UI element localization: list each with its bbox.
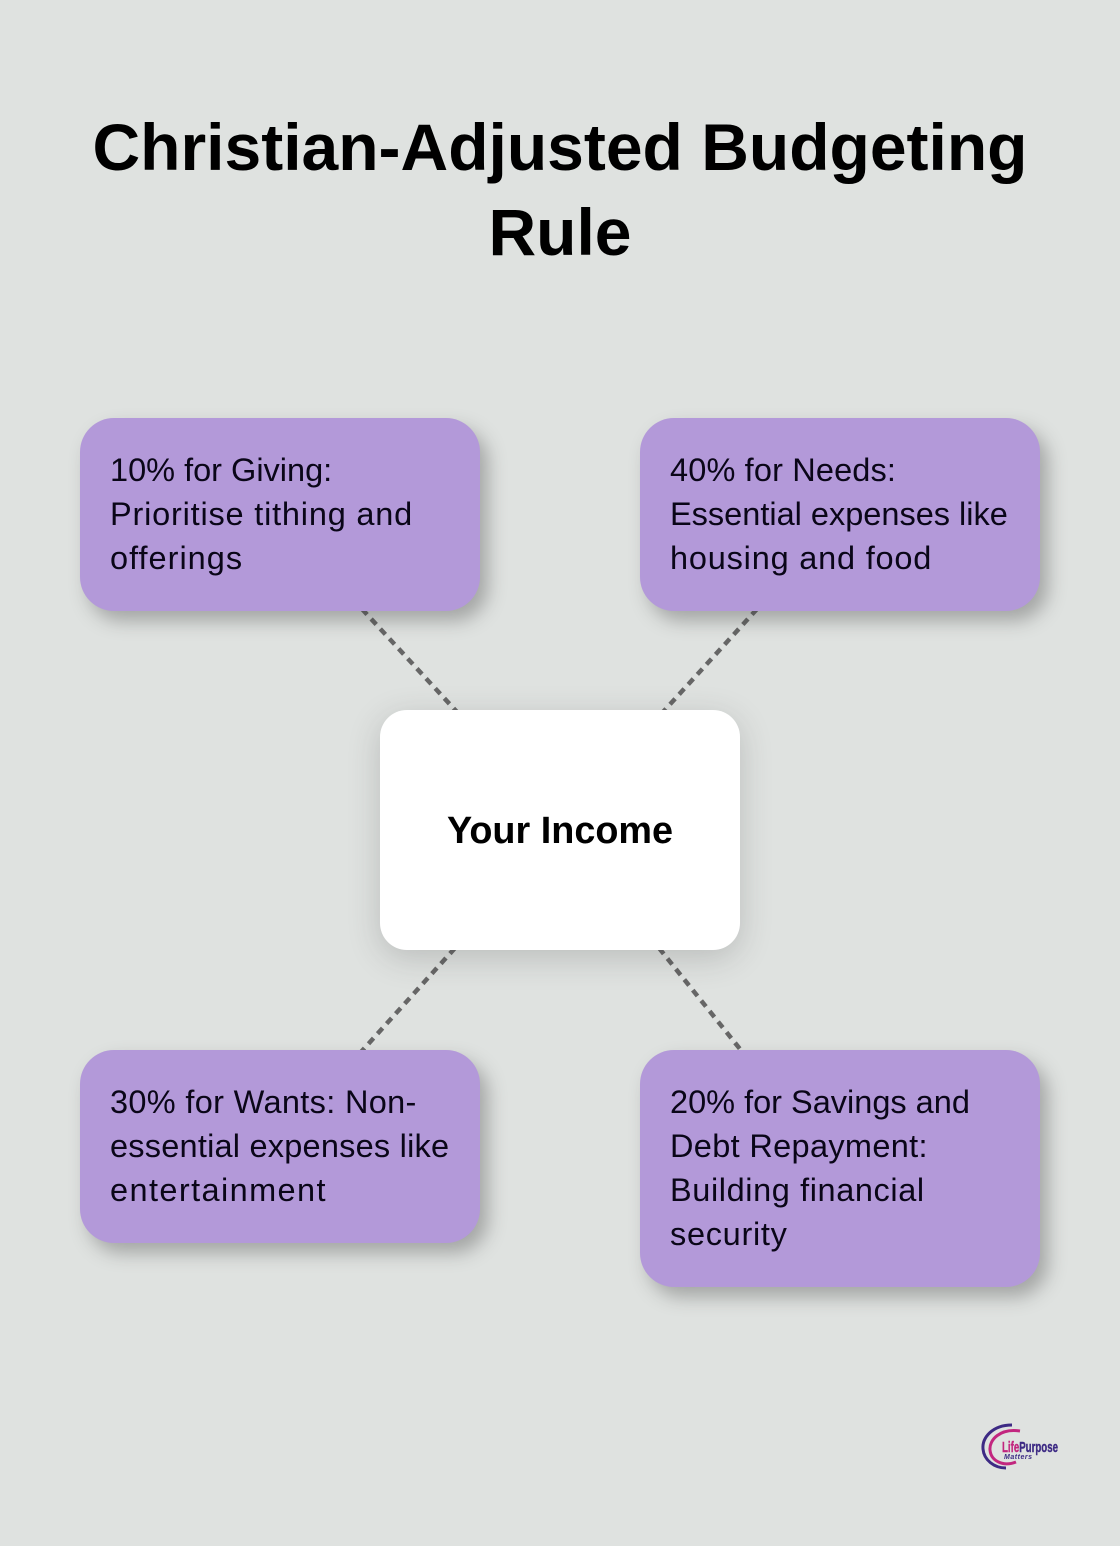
panel: 20% for savings and debt repayment: Debt Repayment: (670, 1128, 928, 1164)
panel: 40% for needs (640, 418, 1040, 611)
title (93, 110, 1027, 269)
panel: 30% for wants: essential expenses like (110, 1128, 449, 1164)
panel: 20% for savings and debt repayment: 20% for Savings and (670, 1084, 970, 1120)
panel: 30% for wants: 30% for Wants: Non- (110, 1084, 417, 1120)
panel: 10% for giving: Prioritise tithing and (110, 496, 413, 532)
icon: Life Purpose Matters logo: Matters (1004, 1454, 1032, 1461)
panel: 20% for savings and debt repayment (640, 1050, 1040, 1287)
panel: 40% for needs: housing and food (670, 540, 932, 576)
panel: 30% for wants: entertainment (110, 1172, 327, 1208)
panel: 10% for giving (80, 418, 480, 611)
panel: 40% for needs: Essential expenses like (670, 496, 1008, 532)
title: Rule (488, 195, 632, 269)
panel: your income (380, 710, 740, 950)
title: Christian-Adjusted Budgeting (93, 110, 1027, 184)
panel: 40% for needs: 40% for Needs: (670, 452, 896, 488)
panel: 10% for giving: offerings (110, 540, 243, 576)
panel: 20% for savings and debt repayment: security (670, 1216, 788, 1252)
panel: your income: Your Income (447, 810, 673, 852)
panel: 10% for giving: 10% for Giving: (110, 452, 332, 488)
panel: 20% for savings and debt repayment: Building financial (670, 1172, 925, 1208)
icon: Life Purpose Matters logo (981, 1424, 1058, 1470)
panel: 30% for wants (80, 1050, 480, 1243)
